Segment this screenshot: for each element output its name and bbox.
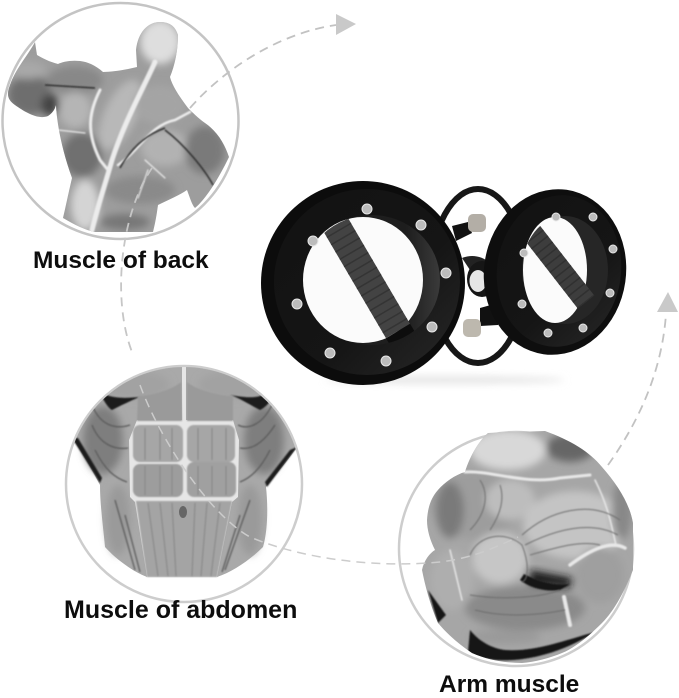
back muscles illustration bbox=[8, 22, 229, 232]
rib shadow under chest bbox=[72, 387, 297, 487]
abs background lines bbox=[129, 420, 239, 577]
rectus fibres bbox=[145, 428, 226, 576]
label: muscle of abdomen: Muscle of abdomen bbox=[64, 596, 297, 624]
dashed connector: abdomen to arm bbox=[140, 385, 518, 564]
panel: arm muscle bbox=[395, 425, 640, 666]
right wheel bbox=[484, 189, 626, 355]
left grip bbox=[330, 215, 410, 351]
centre ring bbox=[462, 256, 497, 297]
label: arm muscle: Arm muscle bbox=[439, 671, 579, 698]
left screws bbox=[292, 204, 451, 366]
product: wheel device bbox=[261, 180, 637, 385]
ground shadow bbox=[325, 376, 565, 384]
centre link ring bbox=[431, 189, 525, 363]
right screws bbox=[518, 213, 617, 337]
arm muscles illustration bbox=[422, 431, 633, 663]
dashed arrow: back to top right bbox=[190, 14, 356, 108]
panel: muscle of abdomen bbox=[60, 360, 305, 602]
label: muscle of back: Muscle of back bbox=[33, 247, 209, 274]
abdomen muscles illustration bbox=[74, 367, 296, 578]
knob bottom bbox=[463, 303, 498, 337]
back tendon highlights bbox=[58, 62, 190, 230]
dashed connector: back to abdomen bbox=[121, 168, 152, 352]
dark gaps between muscles bbox=[530, 570, 572, 588]
back dark contours bbox=[45, 85, 213, 185]
abs blocks bbox=[133, 382, 236, 577]
left wheel bbox=[261, 181, 465, 385]
chest bbox=[83, 371, 284, 555]
panel: muscle of back bbox=[0, 0, 240, 240]
dashed arrow: arm to right bbox=[608, 292, 678, 465]
knob top bbox=[452, 214, 486, 241]
oblique muscle lines bbox=[92, 405, 275, 572]
navel bbox=[179, 506, 187, 518]
arm tendons bbox=[450, 472, 625, 625]
right grip bbox=[530, 230, 586, 302]
